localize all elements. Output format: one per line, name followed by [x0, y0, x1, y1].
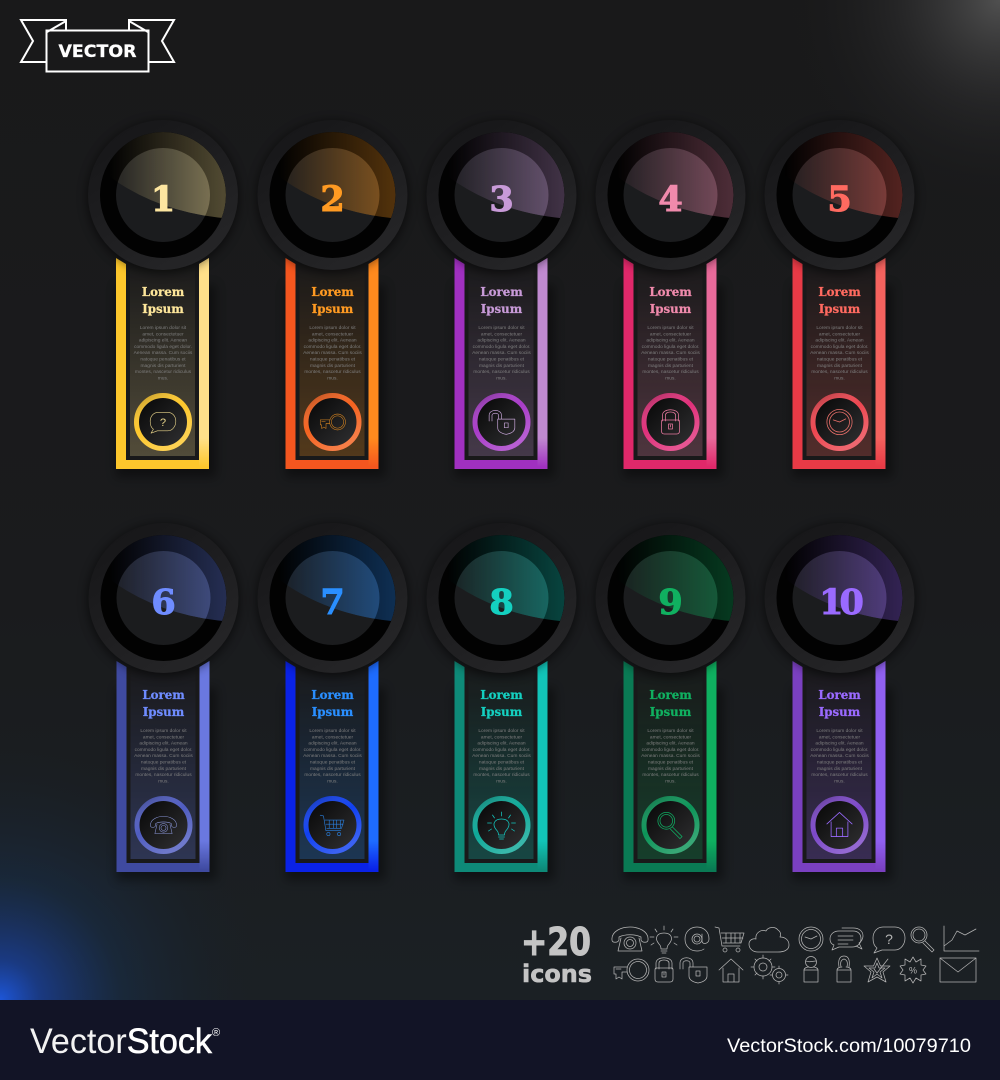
card 2 orange: magnis dis parturient [310, 363, 356, 369]
card 10 violet: mus. [834, 779, 845, 784]
card 4 pink: Lorem [649, 285, 692, 299]
card 10 violet: Lorem ipsum dolor sit [816, 728, 863, 734]
card 5 red: mus. [834, 376, 845, 381]
card 3 purple: Aenean massa. Cum sociis [472, 350, 531, 356]
card 8 teal: Lorem ipsum dolor sit [478, 728, 525, 734]
card 8 teal: mus. [496, 779, 507, 784]
card 7 blue: magnis dis parturient [310, 766, 356, 772]
card 4 pink: magnis dis parturient [648, 363, 694, 369]
card 10 violet: Ipsum [819, 705, 861, 719]
card 2 orange: natoque penatibus et [310, 356, 356, 362]
card 4 pink: 4 [658, 179, 683, 220]
card 2 orange: amet, consectetuer [312, 331, 353, 337]
card 8 teal: montes, nascetur ridiculus [473, 772, 530, 778]
vector ribbon badge [21, 20, 174, 72]
card 8 teal: magnis dis parturient [479, 766, 525, 772]
card 2 orange [256, 120, 408, 477]
card 9 green: mus. [665, 779, 676, 784]
footer image id: VectorStock.com/10079710 [727, 1036, 971, 1057]
card 5 red: natoque penatibus et [817, 356, 863, 362]
card 10 violet: montes, nascetur ridiculus [811, 772, 868, 778]
card 6 indigo: montes, nascetur ridiculus [135, 772, 192, 778]
card 1 yellow: magnis dis parturient [141, 363, 186, 369]
card 3 purple: mus. [496, 376, 507, 381]
card 1 yellow [87, 120, 239, 477]
card 7 blue: Ipsum [312, 705, 354, 719]
card 7 blue: mus. [327, 779, 338, 784]
card 5 red: Ipsum [819, 302, 861, 316]
card 5 red: 5 [827, 179, 852, 220]
card 10 violet: adipiscing elit. Aenean [815, 741, 864, 747]
card 5 red [764, 120, 916, 477]
+20 icons label: icons [522, 960, 592, 988]
card 8 teal: Lorem [480, 688, 523, 702]
card 6 indigo: adipiscing elit. Aenean [139, 741, 188, 747]
card 8 teal: adipiscing elit. Aenean [477, 741, 526, 747]
card 4 pink: montes, nascetur ridiculus [642, 369, 699, 375]
card 9 green: Ipsum [650, 705, 692, 719]
card 3 purple [426, 120, 578, 477]
card 10 violet: commodo ligula eget dolor. [811, 747, 868, 753]
card 9 green: amet, consectetuer [650, 734, 691, 740]
card 1 yellow: natoque penatibus et [140, 356, 186, 362]
card 1 yellow: mus. [158, 376, 168, 381]
card 7 blue: amet, consectetuer [312, 734, 353, 740]
card 4 pink: amet, consectetuer [650, 331, 691, 337]
card 8 teal: natoque penatibus et [479, 760, 525, 766]
card 4 pink [594, 120, 746, 477]
card 2 orange: Ipsum [312, 302, 354, 316]
icon set strip [612, 926, 979, 984]
card 7 blue: 7 [320, 582, 345, 623]
card 10 violet: 10 [819, 582, 862, 623]
card 6 indigo: Lorem [142, 688, 185, 702]
card 9 green: Lorem ipsum dolor sit [647, 728, 694, 734]
card 4 pink: adipiscing elit. Aenean [646, 338, 695, 344]
card 5 red: magnis dis parturient [817, 363, 863, 369]
card 1 yellow: 1 [151, 179, 175, 220]
card 5 red: montes, nascetur ridiculus [811, 369, 868, 375]
card 6 indigo: mus. [158, 779, 169, 784]
card 9 green [594, 523, 746, 880]
card 3 purple: 3 [489, 179, 514, 220]
card 2 orange: Lorem ipsum dolor sit [309, 325, 356, 331]
card 8 teal [426, 523, 578, 880]
card 8 teal: commodo ligula eget dolor. [473, 747, 530, 753]
card 6 indigo: magnis dis parturient [141, 766, 187, 772]
card 2 orange: Lorem [311, 285, 354, 299]
card 5 red: amet, consectetuer [819, 331, 860, 337]
card 1 yellow: Ipsum [142, 302, 184, 316]
card 6 indigo: Ipsum [143, 705, 185, 719]
card 9 green: Aenean massa. Cum sociis [641, 753, 700, 759]
card 10 violet [764, 523, 916, 880]
+20 icons label: +20 [521, 920, 591, 964]
card 3 purple: natoque penatibus et [479, 356, 525, 362]
card 1 yellow: amet, consectetuer [142, 331, 184, 337]
card 1 yellow: montes, nascetur ridiculus [135, 369, 192, 375]
card 1 yellow: Lorem ipsum dolor sit [140, 325, 187, 331]
card 6 indigo: amet, consectetuer [143, 734, 184, 740]
card 3 purple: Lorem [480, 285, 523, 299]
card 7 blue: Lorem ipsum dolor sit [309, 728, 356, 734]
card 2 orange: adipiscing elit. Aenean [308, 338, 357, 344]
card 3 purple: Lorem ipsum dolor sit [478, 325, 525, 331]
card 2 orange: montes, nascetur ridiculus [304, 369, 361, 375]
card 9 green: natoque penatibus et [648, 760, 694, 766]
card 4 pink: commodo ligula eget dolor. [642, 344, 699, 350]
card 7 blue: montes, nascetur ridiculus [304, 772, 361, 778]
card 9 green: 9 [658, 582, 683, 623]
card 3 purple: amet, consectetuer [481, 331, 522, 337]
card 10 violet: Lorem [818, 688, 861, 702]
card 10 violet: natoque penatibus et [817, 760, 863, 766]
card 6 indigo: commodo ligula eget dolor. [135, 747, 192, 753]
vector ribbon badge: VECTOR [58, 42, 136, 62]
card 9 green: adipiscing elit. Aenean [646, 741, 695, 747]
card 4 pink: mus. [665, 376, 676, 381]
card 7 blue: commodo ligula eget dolor. [304, 747, 361, 753]
card 1 yellow: Lorem [142, 285, 185, 299]
card 9 green: commodo ligula eget dolor. [642, 747, 699, 753]
card 2 orange: 2 [320, 179, 345, 220]
card 1 yellow: Aenean massa. Cum sociis [134, 350, 193, 356]
card 3 purple: Ipsum [481, 302, 523, 316]
card 3 purple: commodo ligula eget dolor. [473, 344, 530, 350]
card 4 pink: natoque penatibus et [648, 356, 694, 362]
card 3 purple: adipiscing elit. Aenean [477, 338, 526, 344]
card 7 blue: adipiscing elit. Aenean [308, 741, 357, 747]
card 1 yellow: commodo ligula eget dolor. [134, 344, 192, 350]
card 3 purple: magnis dis parturient [479, 363, 525, 369]
card 6 indigo: Lorem ipsum dolor sit [140, 728, 187, 734]
footer logo: VectorStock [30, 1022, 212, 1061]
card 10 violet: Aenean massa. Cum sociis [810, 753, 869, 759]
card 5 red: adipiscing elit. Aenean [815, 338, 864, 344]
card 7 blue: natoque penatibus et [310, 760, 356, 766]
+20 icons label [521, 920, 592, 988]
card 7 blue: Aenean massa. Cum sociis [303, 753, 362, 759]
card 5 red: Aenean massa. Cum sociis [810, 350, 869, 356]
card 5 red: Lorem [818, 285, 861, 299]
card 6 indigo: Aenean massa. Cum sociis [134, 753, 193, 759]
card 6 indigo: 6 [151, 582, 176, 623]
card 6 indigo [88, 523, 240, 880]
card 8 teal: 8 [489, 582, 514, 623]
card 8 teal: Ipsum [481, 705, 523, 719]
card 2 orange: mus. [327, 376, 338, 381]
card 7 blue: Lorem [311, 688, 354, 702]
footer bar [0, 1000, 1000, 1080]
card 1 yellow: adipiscing elit. Aenean [139, 338, 187, 344]
card 7 blue [256, 523, 408, 880]
card 3 purple: montes, nascetur ridiculus [473, 369, 530, 375]
card 5 red: Lorem ipsum dolor sit [816, 325, 863, 331]
card 10 violet: amet, consectetuer [819, 734, 860, 740]
card 6 indigo: natoque penatibus et [141, 760, 187, 766]
card 9 green: montes, nascetur ridiculus [642, 772, 699, 778]
card 8 teal: Aenean massa. Cum sociis [472, 753, 531, 759]
card 2 orange: commodo ligula eget dolor. [304, 344, 361, 350]
card 9 green: magnis dis parturient [648, 766, 694, 772]
card 9 green: Lorem [649, 688, 692, 702]
card 4 pink: Ipsum [650, 302, 692, 316]
card 10 violet: magnis dis parturient [817, 766, 863, 772]
registered mark: ® [212, 1027, 220, 1039]
card 4 pink: Lorem ipsum dolor sit [647, 325, 694, 331]
card 5 red: commodo ligula eget dolor. [811, 344, 868, 350]
card 4 pink: Aenean massa. Cum sociis [641, 350, 700, 356]
card 8 teal: amet, consectetuer [481, 734, 522, 740]
card 2 orange: Aenean massa. Cum sociis [303, 350, 362, 356]
